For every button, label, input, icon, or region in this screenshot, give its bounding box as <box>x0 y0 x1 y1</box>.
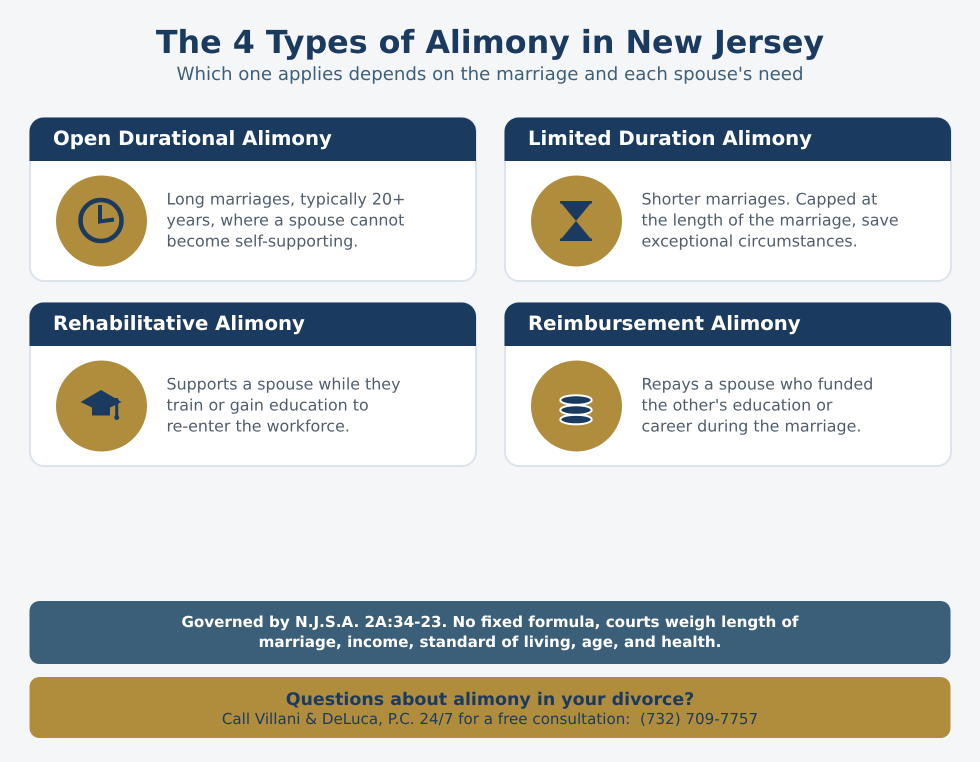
text: description: re-enter the workforce. <box>166 417 350 436</box>
icon: hourglass <box>531 176 622 266</box>
icon: clock <box>56 176 147 266</box>
text: description: Repays a spouse who funded <box>642 375 873 394</box>
heading: Reimbursement Alimony: Reimbursement Alimony <box>528 312 801 335</box>
title: The 4 Types of Alimony in New Jersey <box>156 25 824 61</box>
text: description: the length of the marriage, save <box>642 211 899 230</box>
text: description: Long marriages, typically 20+ <box>166 190 405 209</box>
heading: Rehabilitative Alimony: Rehabilitative Alimony <box>53 312 305 335</box>
heading: Limited Duration Alimony: Limited Duration Alimony <box>528 127 812 150</box>
text: description: become self-supporting. <box>166 232 358 251</box>
callout: contact: Questions about alimony in your divorce? <box>286 690 694 710</box>
callout: statute note: Governed by N.J.S.A. 2A:34-23. No fixed formula, courts weigh length of <box>181 613 799 631</box>
callout: statute note: marriage, income, standard of living, age, and health. <box>259 633 721 651</box>
panel: Open Durational Alimony <box>30 118 476 281</box>
heading: Open Durational Alimony: Open Durational Alimony <box>53 127 332 150</box>
icon: coin stack <box>531 360 622 452</box>
panel: Reimbursement Alimony <box>504 302 951 466</box>
text: description: Supports a spouse while they <box>166 375 400 394</box>
icon: graduation cap <box>56 360 147 452</box>
text: description: years, where a spouse cannot <box>166 211 404 230</box>
text: description: the other's education or <box>642 396 833 415</box>
panel: Limited Duration Alimony <box>504 118 951 281</box>
panel: Rehabilitative Alimony <box>30 302 476 466</box>
text: description: Shorter marriages. Capped at <box>642 190 877 209</box>
text: description: exceptional circumstances. <box>642 232 858 251</box>
callout: contact: Call Villani & DeLuca, P.C. 24/7 for a free consultation: (732) 709-7757 <box>222 710 758 728</box>
callout: contact <box>30 677 950 738</box>
text: description: career during the marriage. <box>642 417 861 436</box>
subtitle: Which one applies depends on the marriage and each spouse's need <box>177 64 803 85</box>
text: description: train or gain education to <box>166 396 369 415</box>
callout: statute note <box>30 601 950 664</box>
